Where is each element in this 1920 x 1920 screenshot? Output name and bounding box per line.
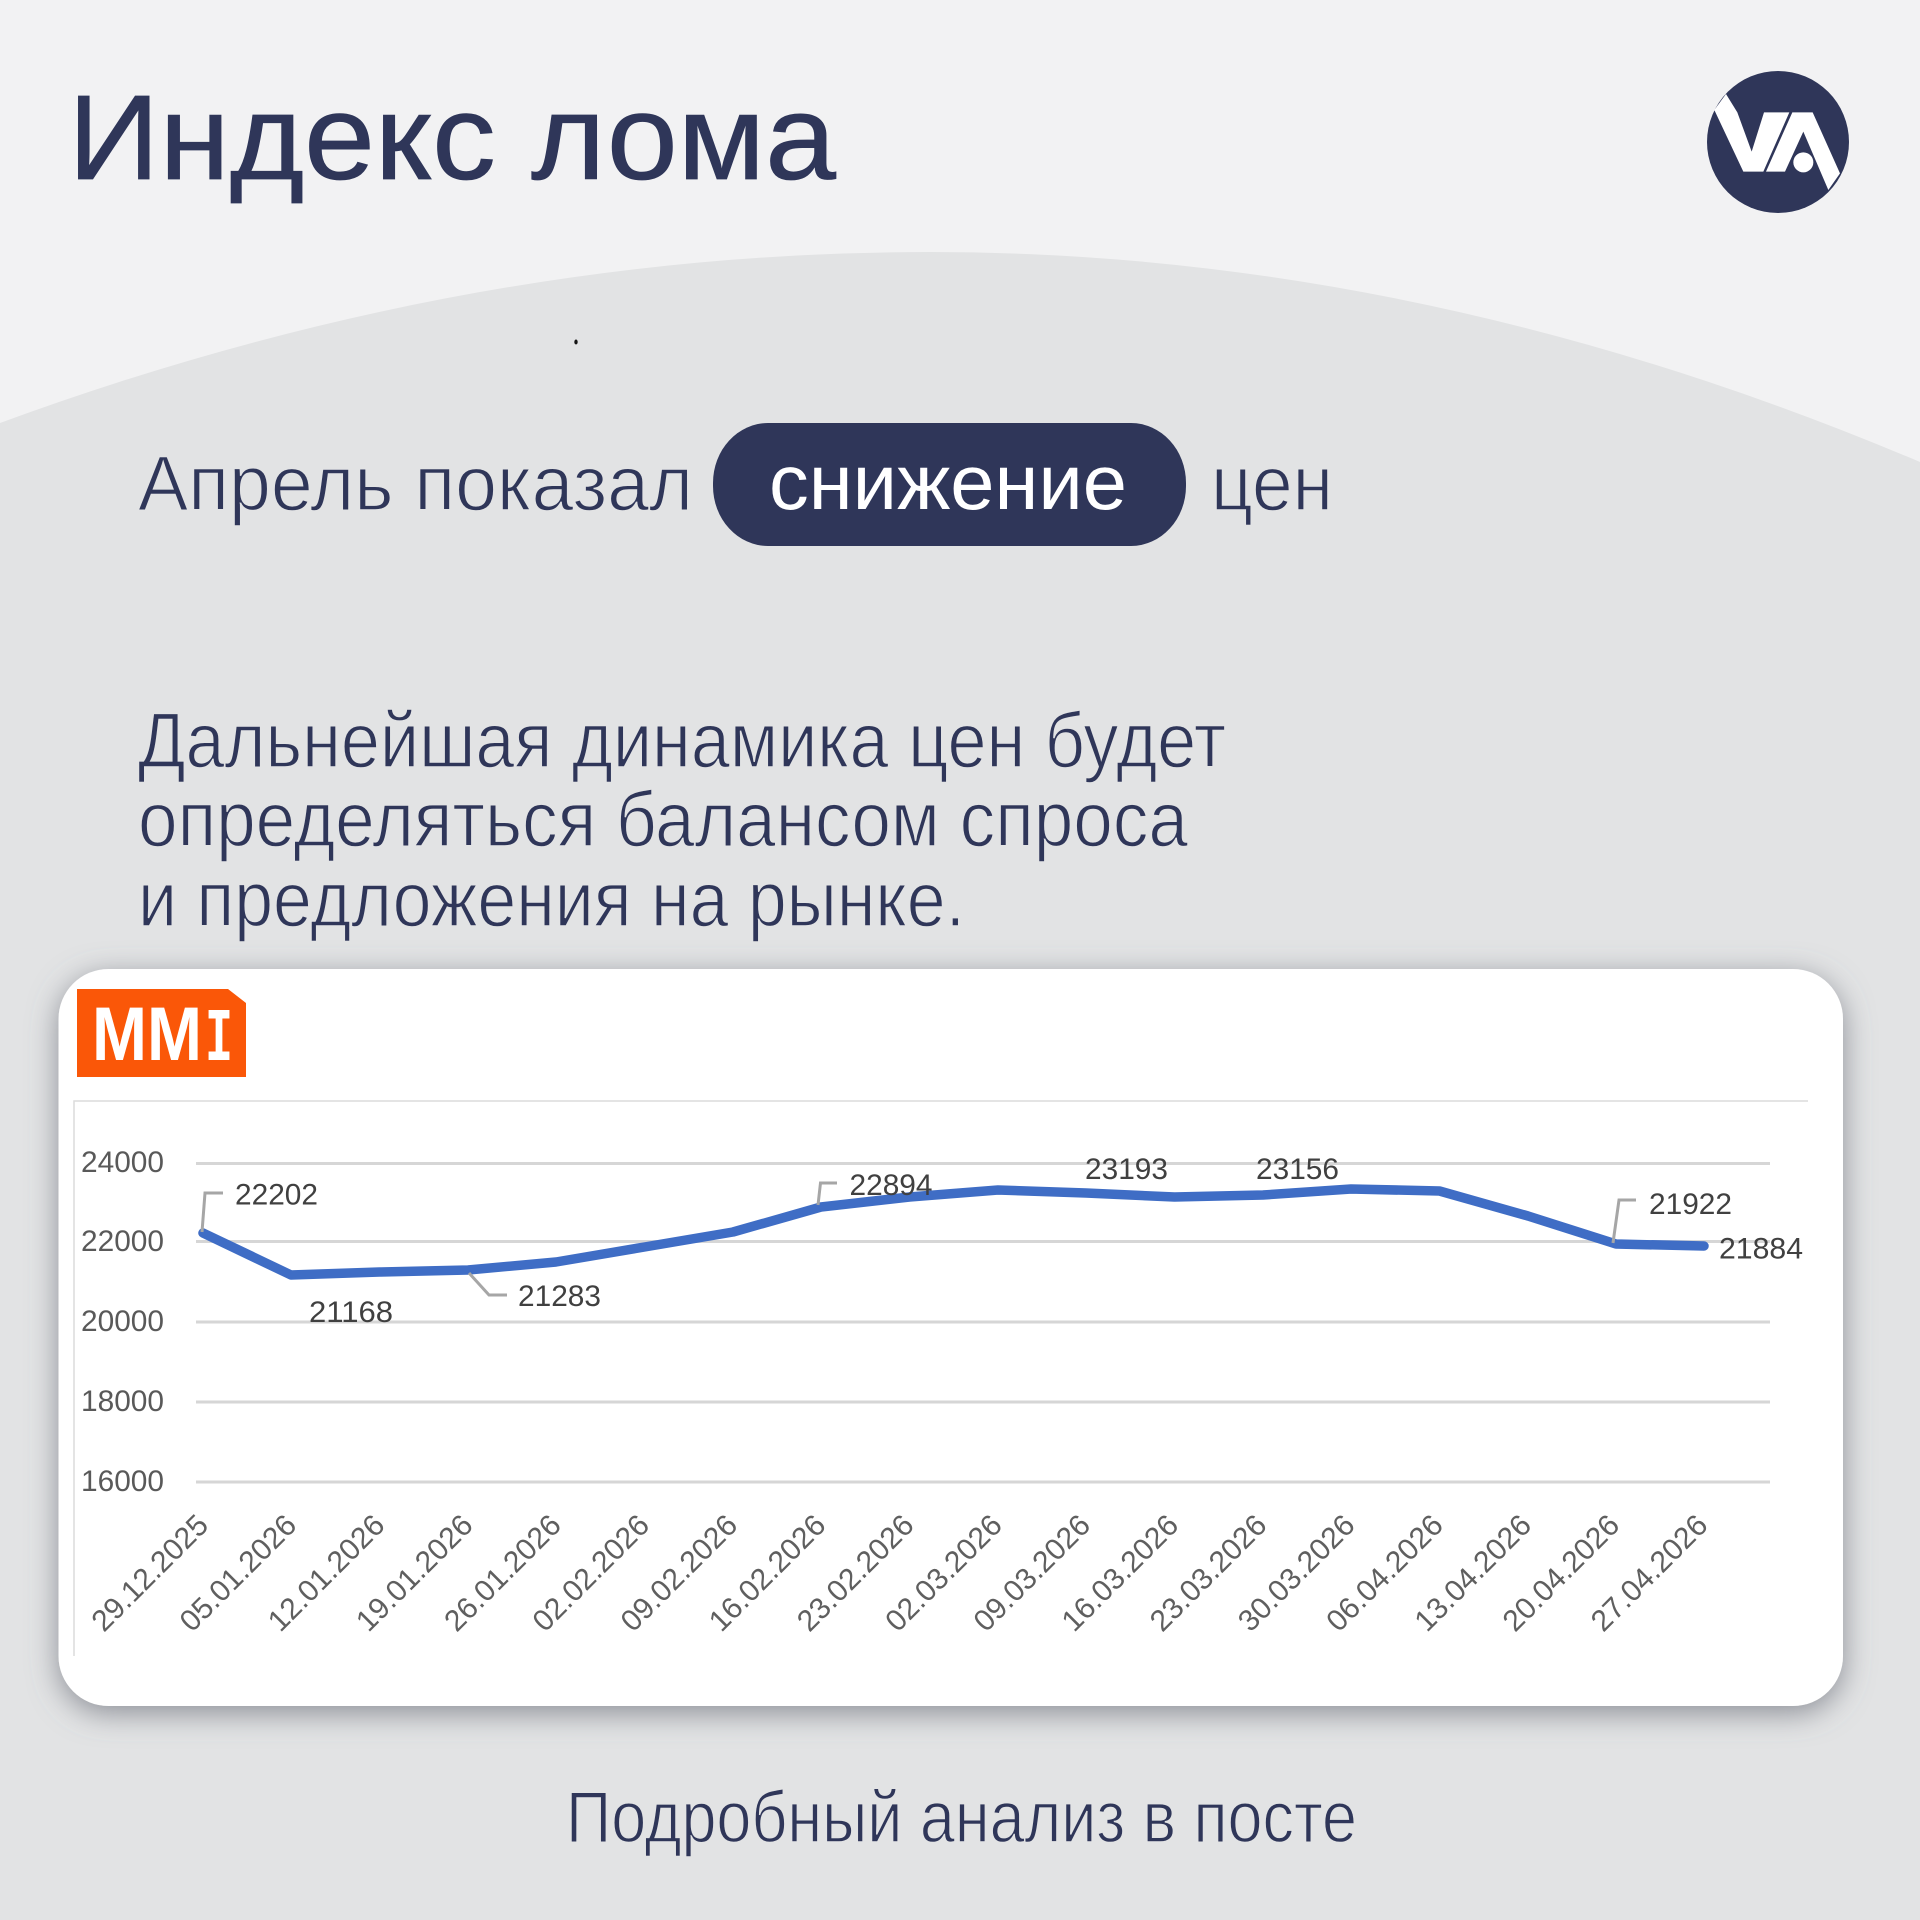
data labels: 21884 (1719, 1232, 1803, 1266)
y axis labels (81, 1146, 164, 1498)
highlight pill (713, 423, 1186, 546)
data labels: 22202 (235, 1178, 318, 1212)
data labels: 23193 (1085, 1153, 1168, 1186)
paragraph: определяться балансом спроса (138, 775, 1189, 863)
y axis labels: 22000 (81, 1225, 164, 1258)
data labels: 21283 (518, 1280, 601, 1313)
title: Индекс лома (68, 69, 837, 205)
x axis date labels: 27.04.2026 (1585, 1509, 1714, 1638)
icon: MMI logo (77, 989, 246, 1083)
x axis date labels: 02.03.2026 (879, 1509, 1009, 1638)
data labels: 22894 (850, 1169, 932, 1202)
highlight pill: снижение (769, 438, 1127, 526)
paragraph (138, 696, 1226, 943)
x axis date labels: 23.02.2026 (791, 1509, 921, 1638)
paragraph: Дальнейшая динамика цен будет (138, 696, 1226, 784)
x axis date labels: 13.04.2026 (1408, 1509, 1538, 1638)
leader lines (202, 1183, 1636, 1295)
x axis date labels: 19.01.2026 (350, 1509, 480, 1638)
x axis date labels: 09.03.2026 (967, 1509, 1097, 1638)
x axis date labels: 06.04.2026 (1320, 1509, 1450, 1638)
x axis date labels: 16.03.2026 (1056, 1509, 1185, 1638)
x axis date labels: 29.12.2025 (85, 1509, 215, 1638)
icon: VA logo (1707, 71, 1849, 213)
footer text: Подробный анализ в посте (566, 1778, 1357, 1858)
y axis labels: 20000 (81, 1305, 164, 1338)
x axis date labels: 09.02.2026 (615, 1509, 744, 1638)
icon: MMI logo: MM (92, 992, 202, 1077)
x axis date labels (85, 1509, 1714, 1638)
data labels (235, 1153, 1803, 1329)
x axis date labels: 02.02.2026 (526, 1509, 656, 1638)
x axis date labels: 05.01.2026 (174, 1509, 303, 1638)
text: headline start: Апрель показал (138, 439, 693, 527)
x axis date labels: 26.01.2026 (438, 1509, 568, 1638)
y axis labels: 18000 (81, 1385, 164, 1418)
data line (203, 1189, 1704, 1275)
headline sentence (138, 423, 1333, 546)
text: headline end: цен (1211, 439, 1333, 527)
x axis date labels: 20.04.2026 (1497, 1509, 1626, 1638)
y axis labels: 16000 (81, 1465, 164, 1498)
data labels: 21922 (1649, 1188, 1732, 1221)
x axis date labels: 23.03.2026 (1144, 1509, 1273, 1638)
x axis date labels: 12.01.2026 (262, 1509, 391, 1638)
data labels: 23156 (1256, 1153, 1339, 1186)
icon: MMI logo: I (205, 997, 233, 1083)
data labels: 21168 (309, 1296, 393, 1329)
panel: chart card (58, 969, 1843, 1706)
paragraph: и предложения на рынке. (138, 855, 965, 943)
x axis date labels: 30.03.2026 (1232, 1509, 1362, 1638)
line chart (74, 1101, 1808, 1656)
x axis date labels: 16.02.2026 (703, 1509, 832, 1638)
y axis labels: 24000 (81, 1146, 164, 1179)
